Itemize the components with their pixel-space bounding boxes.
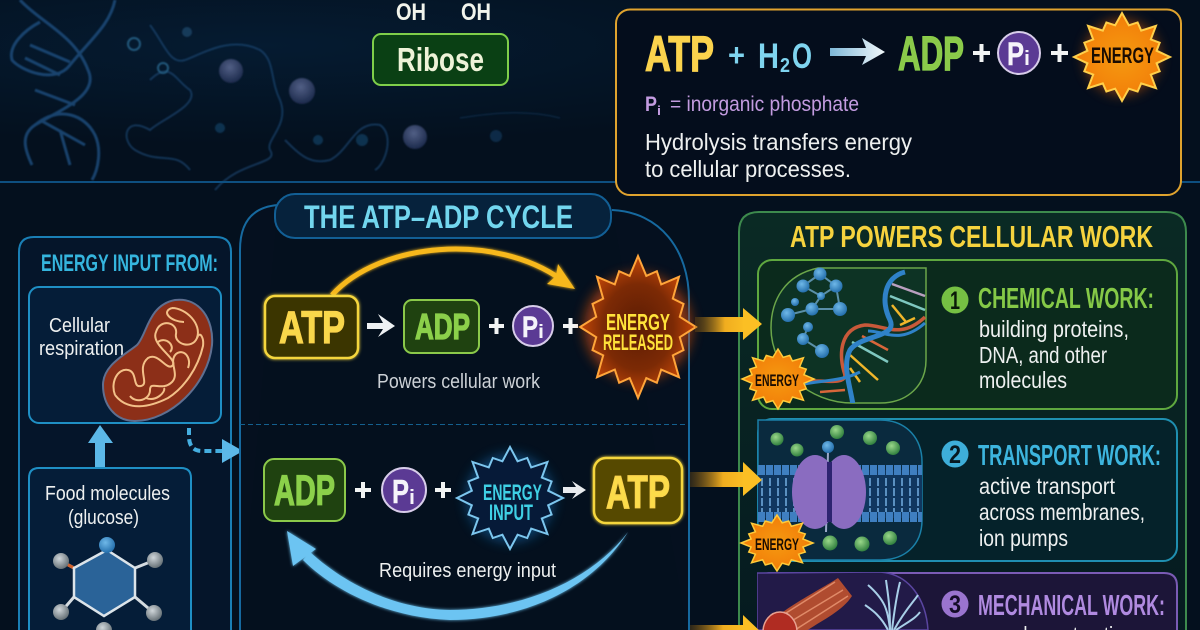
panel: energy input bbox=[19, 237, 231, 630]
phosphate circle bbox=[998, 32, 1040, 74]
box: ATP top bbox=[265, 296, 358, 358]
plus signs bbox=[355, 482, 451, 498]
box: food molecules: Food molecules bbox=[45, 483, 170, 505]
arrow: curved gold release bbox=[332, 249, 575, 295]
transport work description bbox=[979, 473, 1145, 551]
ribose box bbox=[373, 34, 508, 85]
phosphate circle: P bbox=[392, 473, 409, 510]
number badge 3: 3 bbox=[949, 591, 961, 619]
phosphate circle bbox=[513, 306, 553, 346]
background illustration: DNA and molecules bbox=[11, 0, 560, 190]
cycle title pill: THE ATP–ADP CYCLE bbox=[304, 199, 573, 235]
box: cellular respiration: respiration bbox=[39, 338, 124, 360]
icon: glucose ring bbox=[53, 537, 163, 630]
energy burst bbox=[742, 349, 814, 409]
box: ADP top: ADP bbox=[415, 306, 470, 347]
requires caption: Requires energy input bbox=[379, 560, 556, 582]
number badge 1: 1 bbox=[950, 287, 960, 315]
box: food molecules bbox=[29, 468, 191, 630]
arrow: curved blue recharge bbox=[287, 531, 628, 620]
energy released burst: ENERGY bbox=[606, 309, 670, 335]
phosphate circle: P bbox=[522, 311, 538, 344]
ribose label group bbox=[373, 0, 508, 85]
powers caption: Powers cellular work bbox=[377, 371, 541, 393]
arrow: gold to transport work bbox=[690, 462, 762, 496]
hydrolysis description: Hydrolysis transfers energy bbox=[645, 129, 912, 155]
box: ATP bottom: ATP bbox=[606, 466, 670, 518]
number badge 3 bbox=[942, 590, 968, 619]
arrow: input to ATP bbox=[563, 481, 586, 499]
background spheres bbox=[128, 27, 502, 149]
chemical work description: DNA, and other bbox=[979, 342, 1107, 368]
header band background bbox=[0, 0, 1200, 182]
phosphate circle: i bbox=[1024, 48, 1030, 70]
illustration: molecule and DNA bbox=[771, 268, 926, 405]
number badge 2: 2 bbox=[949, 441, 961, 469]
equation: plus water: O bbox=[792, 37, 812, 76]
chemical work description bbox=[979, 316, 1129, 393]
box: cellular respiration bbox=[29, 287, 221, 423]
number badge 1 bbox=[942, 286, 968, 315]
box: ADP top bbox=[404, 300, 479, 353]
divider bbox=[240, 424, 688, 426]
phosphate circle: i bbox=[538, 322, 544, 343]
number badge 2 bbox=[942, 440, 968, 469]
phosphate definition: = inorganic phosphate bbox=[670, 93, 859, 116]
arrow: hydrolysis bbox=[830, 38, 885, 65]
equation: ADP: ADP bbox=[898, 28, 964, 81]
icon: mitochondrion bbox=[103, 300, 212, 421]
arrow: ATP to ADP bbox=[367, 314, 395, 337]
hydrolysis description: to cellular processes. bbox=[645, 156, 851, 182]
ribose text: Ribose bbox=[397, 41, 484, 78]
panel: cellular work bbox=[739, 212, 1186, 630]
equation: ATP: ATP bbox=[645, 26, 714, 82]
box: ATP bottom bbox=[594, 458, 682, 523]
energy released burst bbox=[580, 256, 696, 398]
cycle title pill bbox=[275, 194, 611, 238]
transport work description: active transport bbox=[979, 473, 1116, 499]
arrow: gold to mechanical work bbox=[690, 615, 762, 630]
energy input burst: INPUT bbox=[489, 500, 533, 525]
chemical work description: building proteins, bbox=[979, 316, 1129, 342]
equation: plus water: H bbox=[758, 37, 779, 76]
chemical work description: molecules bbox=[979, 367, 1067, 393]
box: cellular respiration: Cellular bbox=[49, 315, 110, 337]
phosphate circle: i bbox=[409, 487, 415, 509]
transport work description: ion pumps bbox=[979, 525, 1068, 551]
energy burst bbox=[1074, 13, 1170, 101]
equation: plus water: 2 bbox=[780, 55, 790, 77]
energy burst: ENERGY bbox=[755, 371, 799, 390]
panel: hydrolysis equation bbox=[616, 10, 1181, 195]
transport work description: across membranes, bbox=[979, 499, 1145, 525]
phosphate definition: P bbox=[645, 93, 657, 116]
card: mechanical work bbox=[757, 572, 1177, 630]
energy input heading: ENERGY INPUT FROM: bbox=[41, 250, 218, 277]
energy burst: ENERGY bbox=[1091, 43, 1154, 68]
header divider bbox=[0, 181, 1200, 183]
hydroxyl labels bbox=[396, 0, 491, 26]
box: ADP bottom: ADP bbox=[274, 467, 335, 515]
energy burst bbox=[741, 515, 813, 571]
phosphate definition: i bbox=[657, 103, 661, 118]
hydrolysis description bbox=[645, 129, 912, 182]
card: transport work bbox=[741, 419, 1177, 571]
plus signs bbox=[489, 318, 578, 334]
energy burst: ENERGY bbox=[755, 535, 799, 554]
energy input burst bbox=[457, 447, 563, 549]
card: chemical work bbox=[742, 260, 1177, 409]
illustration: muscle and cilia bbox=[757, 572, 928, 630]
energy released burst: RELEASED bbox=[603, 330, 673, 355]
box: food molecules: (glucose) bbox=[68, 507, 139, 529]
panel: ATP-ADP cycle bbox=[240, 194, 696, 630]
illustration: membrane pump bbox=[758, 420, 923, 560]
arrow: food to respiration bbox=[88, 425, 113, 468]
box: ADP bottom bbox=[264, 459, 345, 521]
phosphate circle bbox=[382, 468, 426, 512]
arrow: dashed energy to cycle bbox=[189, 428, 243, 463]
plus signs bbox=[973, 44, 1068, 62]
arrow: gold to chemical work bbox=[695, 308, 762, 340]
energy input burst: ENERGY bbox=[483, 480, 542, 505]
phosphate circle: P bbox=[1007, 36, 1024, 72]
equation: plus water: + bbox=[728, 37, 745, 73]
box: ATP top: ATP bbox=[279, 302, 345, 353]
equation: plus water bbox=[728, 37, 812, 77]
